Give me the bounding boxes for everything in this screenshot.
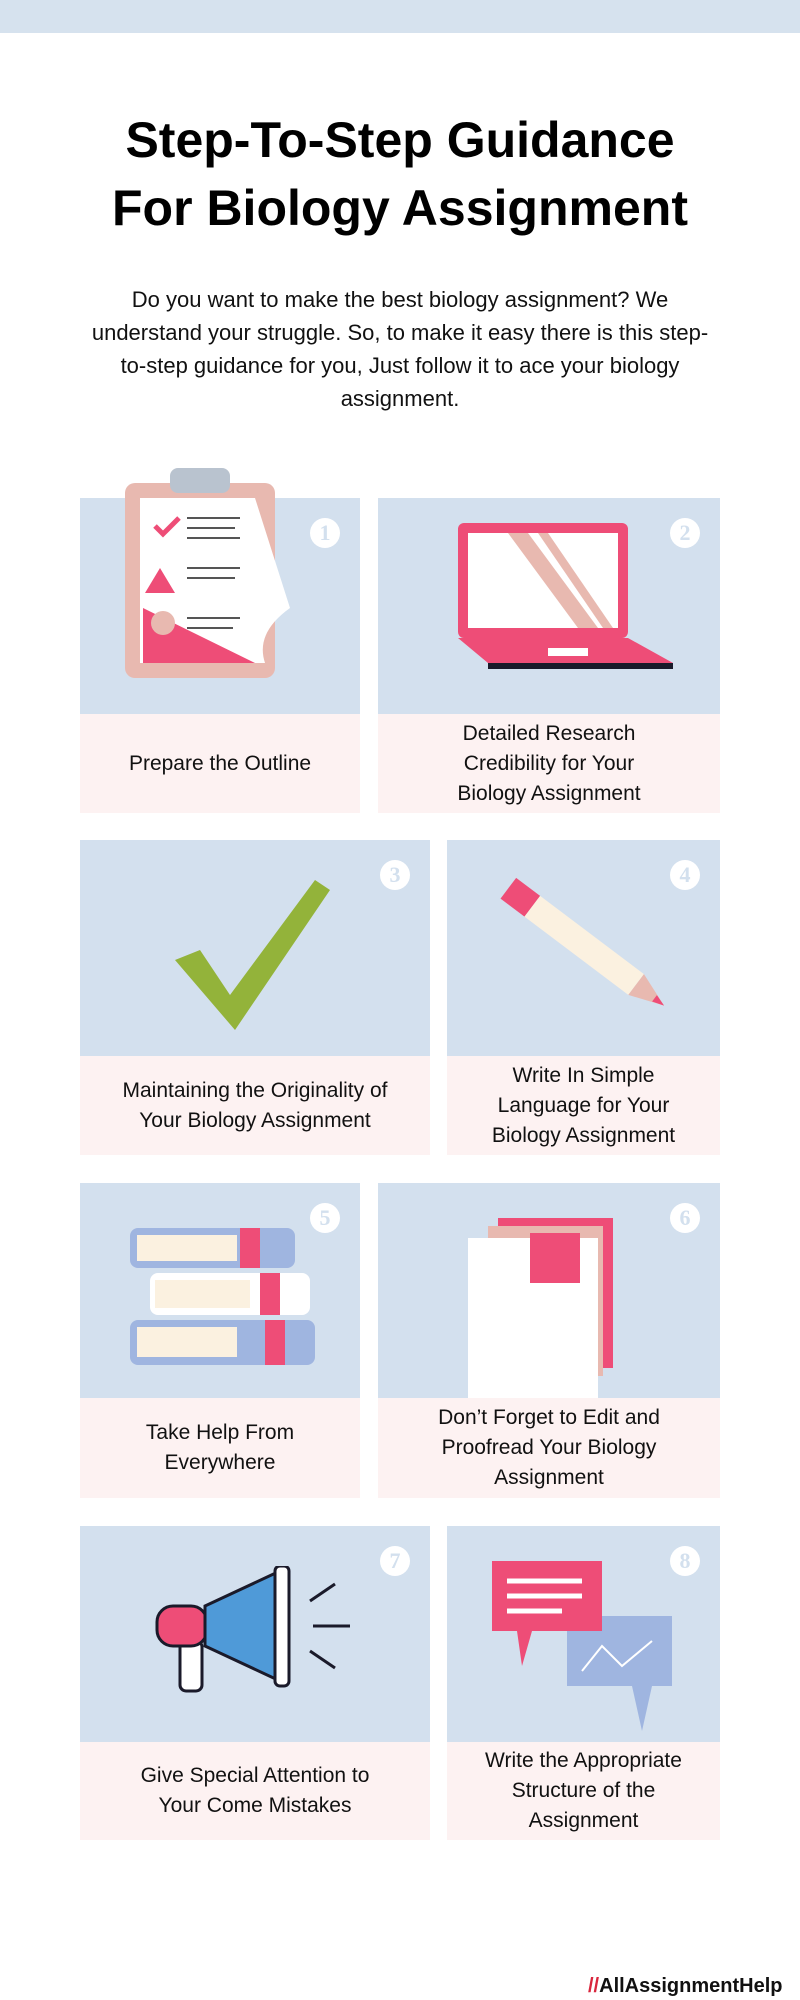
card 3 — [80, 840, 430, 1155]
card 7 — [80, 1526, 430, 1840]
logo: //AllAssignmentHelp — [588, 1975, 782, 1997]
card 3: 3 — [390, 862, 400, 887]
card 1: 1 — [320, 520, 330, 545]
card 6 — [378, 1183, 720, 1498]
card 4 — [447, 840, 720, 1155]
card 2: 2 — [680, 520, 690, 545]
card 6: Don’t Forget to Edit and Proofread Your Biology Assignment — [438, 1406, 660, 1489]
intro text: Do you want to make the best biology assignment? We understand your struggle. So, to make it easy there is this step-to-step guidance for you, Just follow it to ace your biology assignment. — [92, 287, 708, 411]
card 7: 7 — [390, 1548, 400, 1573]
title: For Biology Assignment — [112, 180, 688, 236]
icon: clipboard — [125, 468, 290, 678]
icon: pencil — [500, 878, 664, 1006]
title: Step-To-Step Guidance — [125, 112, 675, 168]
card 1: Prepare the Outline — [129, 752, 311, 774]
card 7: Give Special Attention to Your Come Mistakes — [141, 1764, 369, 1817]
icon: chat bubbles — [492, 1561, 672, 1730]
card 8: 8 — [680, 1548, 690, 1573]
title — [112, 112, 688, 236]
card 8 — [447, 1526, 720, 1840]
card 3: Maintaining the Originality of Your Biology Assignment — [122, 1078, 387, 1132]
card 2: Detailed Research Credibility for Your Biology Assignment — [457, 722, 641, 804]
card 5: Take Help From Everywhere — [146, 1421, 294, 1474]
icon: books — [130, 1228, 315, 1365]
icon: papers — [468, 1218, 613, 1398]
card 2 — [378, 498, 720, 813]
card 5 — [80, 1183, 360, 1498]
card 5: 5 — [320, 1205, 330, 1230]
icon: laptop — [458, 523, 673, 669]
card 4: 4 — [680, 862, 690, 887]
icon: check mark — [175, 880, 330, 1030]
card 1 — [80, 468, 360, 813]
card 6: 6 — [680, 1205, 690, 1230]
card 8: Write the Appropriate Structure of the Assignment — [485, 1749, 682, 1832]
icon: megaphone — [156, 1566, 350, 1692]
card 4: Write In Simple Language for Your Biology Assignment — [492, 1064, 675, 1146]
